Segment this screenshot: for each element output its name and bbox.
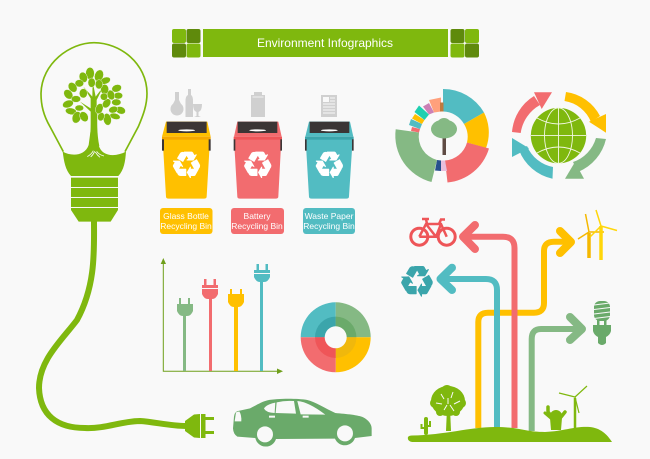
cycle arrow: yellow	[564, 92, 606, 133]
cord plug	[185, 414, 214, 438]
small cactus	[422, 417, 430, 435]
label: waste paper bin: Recycling Bin	[303, 221, 355, 231]
recycling bin: waste paper	[305, 122, 354, 199]
grey icon: newspaper	[321, 95, 337, 117]
turbine front	[590, 210, 617, 260]
label: glass bottle bin	[160, 208, 212, 234]
grey icon: battery	[251, 92, 265, 117]
plug bar: coral	[202, 279, 218, 371]
car	[233, 399, 372, 447]
label: battery bin: Battery	[244, 211, 271, 221]
cycle arrow: green	[565, 138, 606, 179]
spiral tube	[594, 301, 610, 321]
title text: Environment Infographics	[257, 36, 393, 50]
label: battery bin	[231, 208, 284, 234]
icon: wind turbines	[578, 210, 617, 260]
recycling bin: battery	[234, 122, 282, 199]
recycling bin: waste paper: ♻	[313, 145, 345, 186]
quadrant ring chart	[301, 302, 371, 372]
plug bar: yellow	[228, 289, 244, 371]
tree trunk and branches	[80, 82, 108, 146]
recycling globe	[512, 92, 606, 179]
ground with plants	[408, 385, 612, 442]
plug bar chart	[161, 258, 283, 374]
recycling bin: battery: ♻	[242, 145, 274, 186]
icon: bicycle	[411, 219, 455, 245]
large cactus	[545, 407, 565, 430]
tree roots	[87, 151, 104, 157]
power cord	[39, 221, 186, 428]
bulb base	[63, 130, 126, 176]
cycle arrow: coral	[512, 92, 552, 133]
chart axes	[161, 258, 283, 374]
icon: teal recycling symbol: ♻	[398, 257, 436, 306]
branching arrows	[440, 225, 582, 431]
screw stripes	[71, 178, 118, 222]
small wind turbine	[559, 386, 587, 429]
recycling bin: glass bottle: ♻	[170, 145, 202, 186]
arrow: yellow to wind turbines	[478, 231, 571, 428]
arrow: teal to recycling	[440, 268, 497, 428]
donut centre tree	[431, 118, 457, 155]
light bulb with tree	[41, 43, 147, 222]
hill	[408, 427, 612, 442]
label: waste paper bin	[303, 208, 355, 234]
right title squares	[450, 29, 479, 58]
title bar	[203, 29, 448, 57]
title banner	[172, 29, 479, 58]
left title squares	[172, 29, 200, 58]
plug body	[593, 325, 611, 345]
globe	[531, 108, 586, 163]
recycling bin: glass bottle	[162, 122, 211, 199]
label: glass bottle bin: Recycling Bin	[160, 221, 212, 231]
sunburst donut chart	[395, 89, 489, 182]
label: glass bottle bin: Glass Bottle	[163, 211, 209, 221]
arrow: green to energy bulb	[532, 317, 582, 431]
grey icon: glass bottles	[170, 89, 202, 117]
turbine back	[578, 214, 604, 258]
tree on hill	[430, 385, 466, 431]
tree leaves	[61, 67, 127, 126]
plug bar: green	[177, 298, 193, 371]
label: battery bin: Recycling Bin	[231, 221, 283, 231]
cycle arrow: teal	[512, 138, 553, 179]
icon: energy saving bulb	[593, 301, 611, 345]
plug bar: teal	[254, 264, 270, 371]
label: waste paper bin: Waste Paper	[305, 211, 354, 221]
bulb glass outline	[41, 43, 147, 152]
arrow: coral to bicycle	[463, 225, 514, 428]
